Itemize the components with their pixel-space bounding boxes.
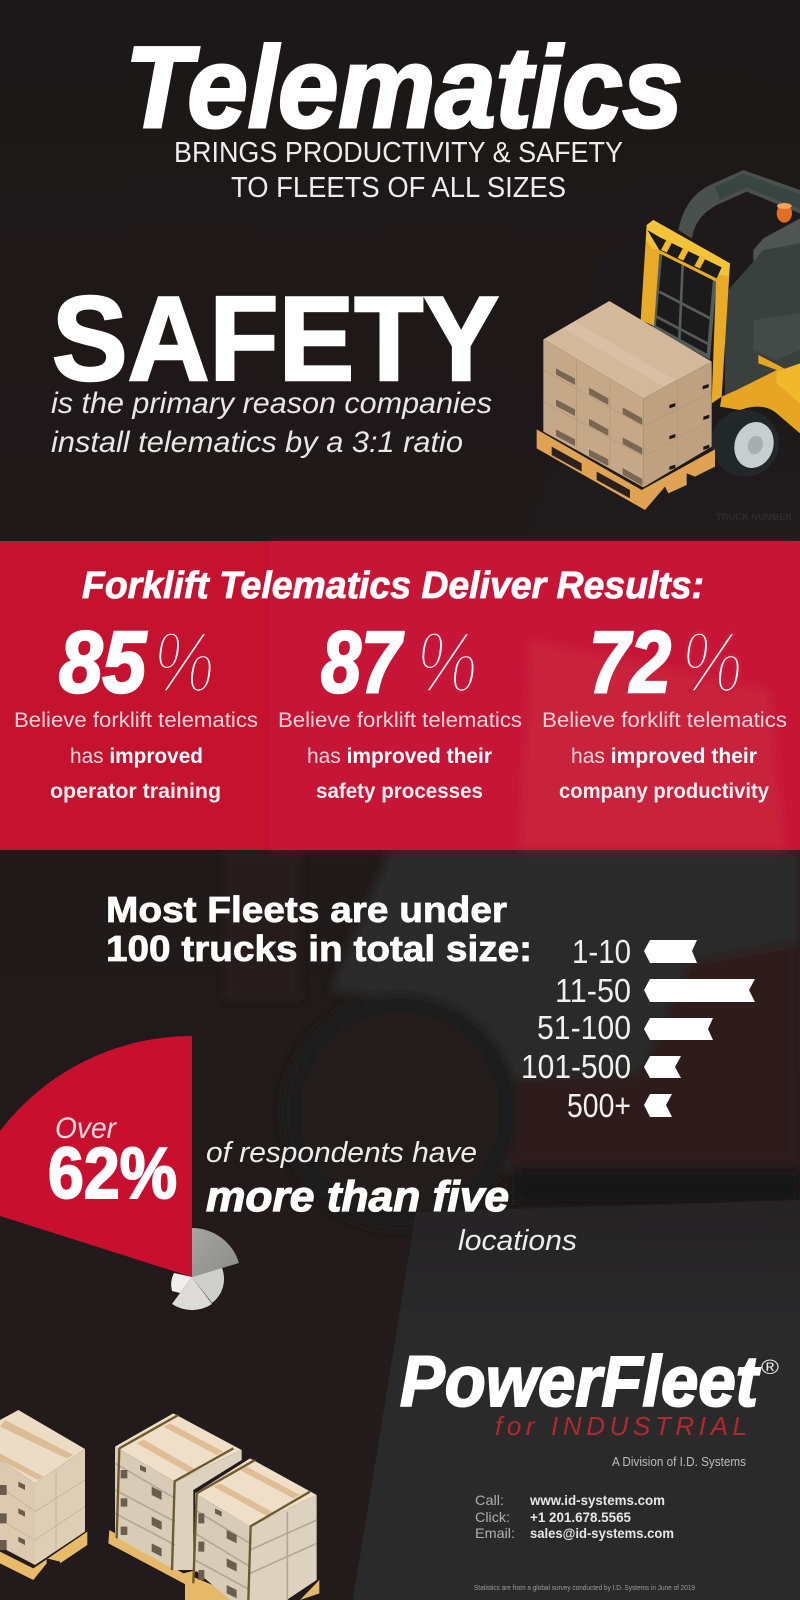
callout text: locations bbox=[206, 1137, 577, 1257]
bar chart: fleet sizes bbox=[521, 933, 755, 1124]
pie slice: bottom bbox=[172, 1277, 212, 1310]
callout text: locations: more than five bbox=[206, 1173, 509, 1221]
bar labels: 51-100 bbox=[537, 1009, 631, 1046]
contact details: sales@id-systems.com bbox=[530, 1525, 674, 1541]
safety statement: is the primary reason companies bbox=[51, 387, 492, 420]
heading: fleet size: Most Fleets are under bbox=[106, 889, 507, 930]
contact details: Email: bbox=[475, 1525, 515, 1541]
beacon light bbox=[777, 203, 792, 223]
contact details: +1 201.678.5565 bbox=[530, 1509, 631, 1525]
pie slice: grey bbox=[192, 1228, 239, 1277]
contact details: Call: bbox=[475, 1492, 504, 1508]
stat: 85 percent: has improved bbox=[70, 745, 203, 768]
panel: results band bbox=[0, 541, 800, 850]
callout text: locations: of respondents have bbox=[206, 1137, 477, 1169]
subtitle: TO FLEETS OF ALL SIZES bbox=[231, 172, 566, 204]
stat: 72 percent: Believe forklift telematics bbox=[542, 709, 787, 732]
stat: 87 percent: % bbox=[416, 615, 478, 711]
pallet bbox=[537, 429, 715, 510]
callout: over 62 percent: 62% bbox=[48, 1134, 177, 1214]
subtitle: BRINGS PRODUCTIVITY & SAFETY bbox=[174, 137, 623, 169]
pallet of boxes: middle bbox=[108, 1413, 242, 1585]
footnote: Statistics are from a global survey conducted by I.D. Systems in June of 2019 bbox=[474, 1583, 695, 1592]
band heading: Forklift Telematics Deliver Results: bbox=[82, 565, 704, 607]
stat: 72 percent bbox=[542, 614, 787, 803]
contact details: Click: bbox=[475, 1509, 510, 1525]
stat: 87 percent: safety processes bbox=[316, 780, 483, 803]
callout text: locations: locations bbox=[458, 1225, 577, 1257]
bar labels: 1-10 bbox=[572, 933, 631, 970]
stat: 85 percent: % bbox=[153, 615, 215, 711]
callout: over 62 percent: Over bbox=[55, 1112, 117, 1145]
stat: 87 percent bbox=[278, 614, 522, 803]
pie slice: left bbox=[171, 1273, 192, 1293]
heading: fleet size: 100 trucks in total size: bbox=[106, 928, 532, 969]
bar labels: 500+ bbox=[567, 1087, 631, 1124]
forklift cage bbox=[678, 170, 800, 398]
stat: 72 percent: company productivity bbox=[559, 780, 769, 803]
wheel bbox=[711, 410, 780, 477]
bar labels: 11-50 bbox=[555, 972, 631, 1009]
heading: safety: SAFETY bbox=[52, 272, 499, 406]
hazard stripes bbox=[647, 230, 722, 278]
title: Telematics bbox=[125, 24, 683, 152]
stat: 72 percent: 72 bbox=[589, 614, 671, 711]
forklift illustration bbox=[537, 170, 800, 510]
logo: PowerFleet: PowerFleet bbox=[400, 1343, 761, 1422]
for industrial: for INDUSTRIAL bbox=[495, 1411, 747, 1441]
bar labels: 101-500 bbox=[521, 1048, 631, 1085]
safety statement: install telematics by a 3:1 ratio bbox=[51, 426, 463, 459]
safety statement bbox=[51, 387, 492, 459]
contact details: www.id-systems.com bbox=[529, 1492, 665, 1508]
stat: 87 percent: 87 bbox=[321, 614, 404, 711]
registered mark: ® bbox=[761, 1357, 779, 1379]
heading: fleet size bbox=[106, 889, 532, 969]
stat: 85 percent: 85 bbox=[59, 614, 147, 711]
stat: 72 percent: % bbox=[681, 615, 743, 711]
forklift body bbox=[720, 355, 800, 433]
bar labels bbox=[521, 933, 631, 1124]
faint truck number text: TRUCK NUMBER bbox=[716, 512, 793, 522]
pallet of boxes: front bbox=[185, 1458, 319, 1600]
stat: 85 percent: operator training bbox=[50, 780, 221, 803]
division line: A Division of I.D. Systems bbox=[612, 1454, 746, 1469]
pie chart bbox=[0, 1036, 239, 1310]
stat: 87 percent: Believe forklift telematics bbox=[278, 709, 522, 732]
background: faint ghost at top behind forklift bbox=[530, 190, 800, 540]
background: grey floor wedge behind logo bbox=[353, 1200, 800, 1600]
yellow mast bbox=[641, 220, 730, 403]
stacked boxes bbox=[543, 301, 712, 487]
pie slice: light right bbox=[192, 1268, 224, 1303]
background: ghosted truck photo bbox=[225, 850, 800, 1230]
subtitle bbox=[174, 137, 623, 204]
contact details bbox=[475, 1492, 674, 1541]
stat: 85 percent bbox=[14, 614, 258, 803]
stat: 85 percent: Believe forklift telematics bbox=[14, 709, 258, 732]
mast grille bbox=[654, 252, 715, 357]
pallet of boxes: left bbox=[0, 1410, 87, 1580]
stat: 72 percent: has improved their bbox=[571, 745, 757, 768]
pie slice: red 62 percent bbox=[0, 1036, 192, 1277]
band background: ghosted truck bbox=[270, 541, 800, 850]
stat: 87 percent: has improved their bbox=[307, 745, 492, 768]
bars bbox=[644, 940, 755, 1117]
